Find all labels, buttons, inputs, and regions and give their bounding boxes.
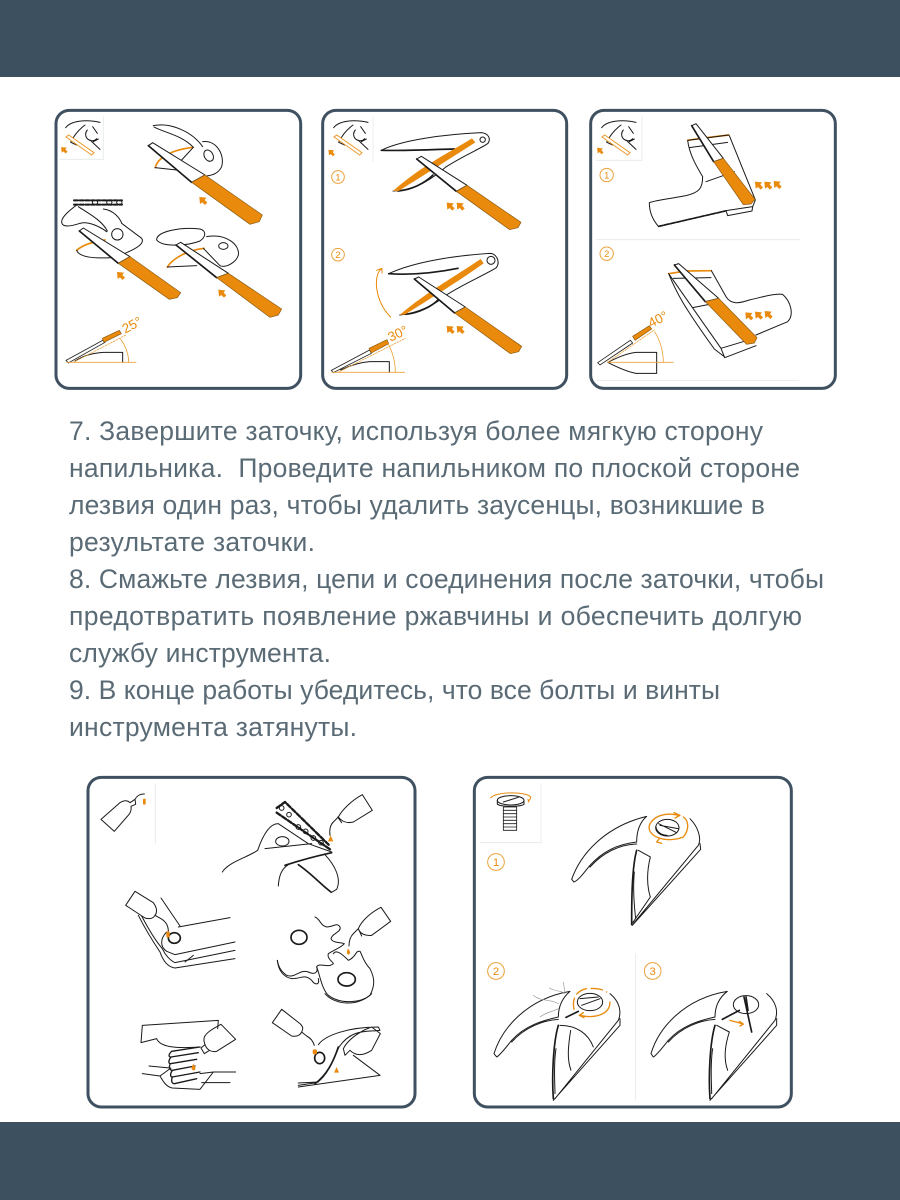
illustration: oiling bypass head — [272, 1009, 380, 1087]
icon: oil bottle thumbnail — [101, 794, 146, 831]
illustration: anvil lopper head with file — [157, 228, 282, 317]
illustration: bypass lopper head with file — [148, 125, 262, 224]
number 1 — [488, 854, 504, 870]
diagram: 25 degree angle — [66, 314, 144, 363]
illustration: lopper blades step 3 — [651, 991, 777, 1100]
text block: steps 7 to 9: 9. В конце работы убедитесь, что все болты и винты — [69, 675, 720, 705]
icon: sharpening thumbnail — [61, 121, 100, 155]
number 1: 1 — [604, 170, 609, 180]
icon: screw with rotation arrows — [491, 793, 531, 830]
text block: steps 7 to 9: результате заточки. — [69, 527, 315, 557]
number 1 — [600, 168, 613, 182]
panel: lubrication points — [88, 777, 415, 1107]
icon: sharpening thumbnail — [328, 121, 368, 156]
number 2 — [600, 247, 613, 260]
panel: sharpening a curved blade at 30 degrees — [323, 110, 567, 388]
number 3: 3 — [650, 966, 656, 978]
footer band — [0, 1122, 900, 1200]
text block: steps 7 to 9: инструмента затянуты. — [69, 712, 357, 742]
text block: steps 7 to 9: предотвратить появление ржавчины и обеспечить долгую — [69, 601, 802, 631]
illustration: oiling spring — [141, 1020, 236, 1089]
icon: sharpening thumbnail — [597, 121, 636, 155]
text block: steps 7 to 9: напильника. Проведите напильником по плоской стороне — [69, 453, 800, 483]
illustration: lopper blades step 1 — [572, 813, 701, 925]
panel: sharpening three lopper types at 25 degrees — [56, 110, 301, 388]
text block: steps 7 to 9: службу инструмента. — [69, 638, 331, 668]
number 2 — [488, 963, 504, 979]
text block: steps 7 to 9 — [69, 416, 824, 742]
illustration: blade 1 with file — [649, 124, 782, 227]
panel: sharpening a hatchet-like blade at 40 degrees — [591, 110, 835, 388]
number 1: 1 — [493, 857, 499, 869]
number 3 — [644, 963, 661, 979]
text block: steps 7 to 9: 7. Завершите заточку, используя более мягкую сторону — [69, 416, 764, 446]
illustration: blade step 2 with rotation arrow — [376, 253, 522, 354]
diagram: 30 degree angle — [331, 323, 410, 373]
diagram: 30 degree angle: 30° — [385, 323, 410, 345]
diagram: 25 degree angle: 25° — [119, 314, 144, 336]
illustration: oiling gear teeth — [277, 907, 391, 1003]
illustration: blade step 1 — [381, 133, 521, 230]
number 1 — [332, 171, 344, 183]
number 1: 1 — [335, 172, 341, 182]
number 2: 2 — [335, 250, 341, 260]
illustration: blade 2 with file — [669, 264, 791, 358]
diagram: 40 degree angle — [598, 308, 673, 373]
number 2 — [332, 248, 344, 261]
illustration: oiling chain — [222, 795, 372, 893]
number 2: 2 — [604, 249, 609, 259]
illustration: lopper blades step 2 — [494, 982, 620, 1100]
text block: steps 7 to 9: лезвия один раз, чтобы удалить заусенцы, возникшие в — [69, 490, 765, 520]
text block: steps 7 to 9: 8. Смажьте лезвия, цепи и соединения после заточки, чтобы — [69, 564, 824, 594]
illustration: chain lopper head with file — [62, 200, 181, 299]
diagram: 40 degree angle: 40° — [646, 308, 670, 331]
number 2: 2 — [493, 966, 499, 978]
header band — [0, 0, 900, 77]
panel: adjusting the pivot bolt — [474, 777, 791, 1107]
illustration: oiling pivot joint — [126, 891, 235, 968]
